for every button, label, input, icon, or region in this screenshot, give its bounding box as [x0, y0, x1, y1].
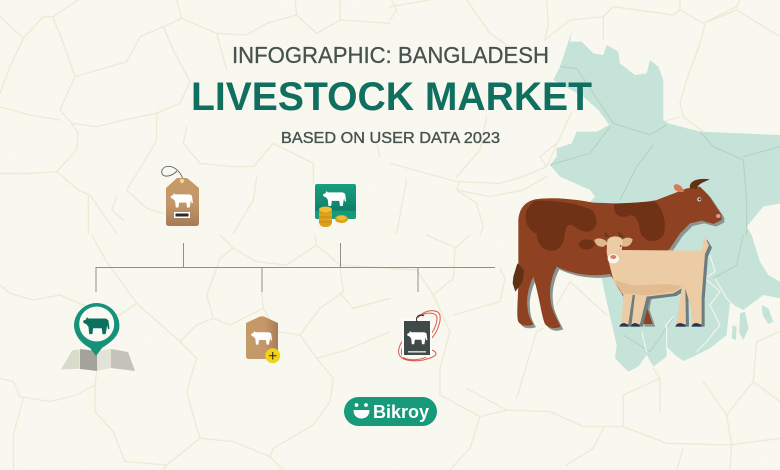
delta channels — [642, 255, 740, 352]
cow patches — [526, 201, 597, 251]
icon: map location pin — [60, 303, 135, 371]
goat hooves — [619, 323, 702, 327]
icon: business lanyard badge — [399, 311, 440, 361]
goat head — [607, 236, 623, 264]
top-right, offset 1170 — [390, 0, 780, 235]
cow ear and horn — [674, 184, 684, 192]
title line 1: INFOGRAPHIC: BANGLADESH — [232, 42, 549, 68]
connector tree — [96, 243, 495, 292]
map islands — [732, 305, 773, 340]
cow tail — [513, 263, 524, 292]
goat eyes — [604, 245, 606, 247]
goat shadow — [611, 239, 712, 327]
map of Bangladesh — [550, 32, 780, 372]
map landmass — [550, 32, 780, 372]
icon: cow price with coins — [315, 184, 356, 227]
main title: LIVESTOCK MARKET — [191, 75, 592, 119]
goat muzzle — [608, 254, 619, 263]
map rivers — [550, 67, 780, 352]
top-left — [0, 0, 78, 93]
title block — [191, 42, 592, 147]
goat body — [608, 237, 709, 324]
goat horns — [604, 232, 624, 237]
icon: price tag — [162, 166, 199, 226]
cow eye and nose — [697, 197, 701, 201]
cow body — [517, 187, 722, 328]
logo wordmark: Bikroy — [373, 402, 429, 422]
logo smile icon — [354, 403, 370, 418]
cow shadow — [520, 189, 724, 331]
goat belly shade — [615, 280, 687, 295]
goat ears — [594, 238, 633, 247]
subtitle: BASED ON USER DATA 2023 — [281, 130, 500, 147]
illustration: cow and goat — [513, 179, 724, 331]
logo: Bikroy — [344, 397, 437, 426]
bottom-right — [390, 235, 780, 470]
icon: add listing tag — [246, 316, 280, 363]
bottom-left, offset y 705 — [0, 235, 390, 470]
